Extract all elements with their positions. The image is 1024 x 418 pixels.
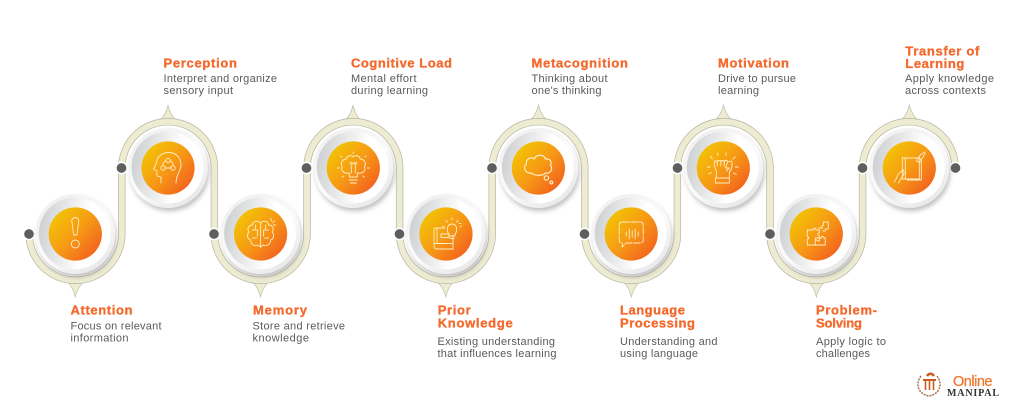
label: language processing: Understanding and (620, 336, 718, 348)
icon: puzzle pieces (807, 222, 828, 245)
label: prior knowledge: Knowledge (438, 316, 513, 330)
label: motivation: learning (718, 85, 759, 97)
label: prior knowledge (438, 302, 556, 360)
icon: raised fist (707, 153, 738, 183)
icon: speech waveform frame (619, 222, 643, 247)
icon: brain (248, 218, 276, 247)
label: motivation: Drive to pursue (718, 73, 796, 85)
label: problem solving (816, 302, 886, 360)
label: memory: Memory (253, 302, 308, 318)
node: memory (221, 194, 302, 277)
icon: thought cloud (525, 155, 553, 184)
label: cognitive load: Mental effort (351, 73, 416, 85)
node: problem solving (776, 194, 857, 277)
node: language processing (591, 194, 672, 277)
label: language processing: Language (620, 302, 685, 318)
label: transfer of learning: Apply knowledge (905, 73, 994, 85)
label: memory: Store and retrieve (252, 320, 345, 332)
icon: book with bulb (434, 218, 462, 249)
icon: brain light bulb (337, 152, 369, 183)
label: memory (252, 302, 345, 344)
label: attention: information (70, 332, 128, 344)
serpentine track (29, 105, 955, 297)
label: cognitive load (351, 56, 452, 97)
label: attention: Attention (70, 302, 133, 318)
logo: Online Manipal (918, 374, 999, 399)
label: metacognition: Metacognition (532, 56, 628, 70)
node: attention (35, 194, 116, 277)
label: transfer of learning: Transfer of (905, 44, 980, 58)
icon: exclamation mark (71, 218, 79, 248)
label: cognitive load: Cognitive Load (351, 56, 452, 70)
label: problem solving: Problem- (816, 302, 877, 318)
node: perception (128, 128, 209, 211)
logo emblem (918, 374, 940, 396)
label: metacognition: one's thinking (532, 85, 602, 97)
label: language processing: Processing (620, 316, 695, 330)
label: transfer of learning: Learning (905, 56, 964, 71)
label: problem solving: Apply logic to (816, 336, 886, 348)
label: attention (70, 302, 162, 344)
label: motivation: Motivation (718, 56, 789, 70)
label: cognitive load: during learning (351, 85, 428, 97)
node: cognitive load (313, 128, 394, 211)
node: motivation (683, 128, 764, 211)
node: transfer of learning (869, 128, 950, 211)
label: motivation (718, 56, 796, 97)
label: problem solving: challenges (816, 348, 870, 360)
label: transfer of learning: across contexts (905, 85, 986, 97)
icon: head with network (154, 152, 181, 183)
label: prior knowledge: Existing understanding (438, 336, 555, 348)
logo: Online Manipal: MANIPAL (947, 388, 999, 399)
label: attention: Focus on relevant (70, 320, 162, 332)
label: transfer of learning (905, 44, 994, 97)
connector dots (23, 162, 961, 240)
label: perception: Perception (164, 56, 237, 70)
icon: hands passing book (894, 152, 925, 183)
label: problem solving: Solving (816, 316, 862, 330)
label: language processing: using language (620, 348, 698, 360)
label: perception (164, 56, 277, 97)
logo: Online Manipal: Online (953, 374, 992, 390)
label: perception: Interpret and organize (164, 73, 277, 85)
label: metacognition: Thinking about (532, 73, 608, 85)
track pointers (65, 105, 920, 297)
node: prior knowledge (406, 194, 487, 277)
label: prior knowledge: that influences learning (438, 348, 556, 360)
label: prior knowledge: Prior (438, 302, 471, 318)
label: memory: knowledge (252, 332, 309, 344)
label: language processing (620, 302, 718, 360)
label: metacognition (532, 56, 628, 97)
node: metacognition (498, 128, 579, 211)
label: perception: sensory input (164, 85, 233, 97)
